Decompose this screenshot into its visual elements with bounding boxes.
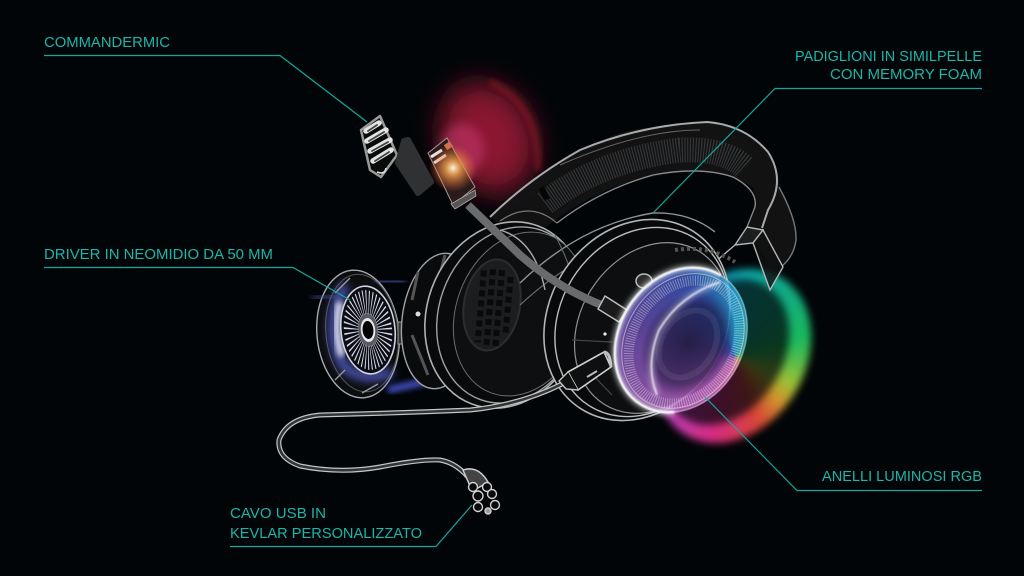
microphone grille	[361, 116, 397, 177]
callout: USB cable: CAVO USB IN	[230, 505, 326, 522]
USB cable multi-core end	[463, 469, 500, 514]
callout: driver	[44, 246, 350, 300]
glowing RGB ring lens	[615, 268, 748, 412]
USB cable	[279, 384, 562, 482]
headband slider	[715, 227, 783, 290]
callout: USB cable: KEVLAR PERSONALIZZATO	[230, 525, 422, 542]
rainbow glow behind ear cup	[658, 263, 818, 449]
microphone foam	[398, 140, 431, 193]
callout: ear pads: PADIGLIONI IN SIMILPELLE	[795, 48, 982, 65]
microphone capsule	[428, 138, 477, 209]
rear housing and ear pad	[394, 199, 611, 431]
red microphone glow	[416, 61, 560, 215]
callout: ear pads: CON MEMORY FOAM	[830, 66, 982, 83]
callout: driver: DRIVER IN NEOMIDIO DA 50 MM	[44, 246, 273, 263]
callout: ear pads	[653, 48, 982, 213]
microphone boom	[468, 205, 627, 322]
callout: USB cable	[230, 505, 472, 546]
callout: RGB rings	[705, 397, 982, 490]
lens rings	[588, 243, 774, 437]
headband	[490, 122, 796, 268]
driver	[311, 266, 428, 402]
callout: CommanderMic	[44, 34, 367, 122]
large ear cup	[500, 184, 767, 456]
callout: CommanderMic: COMMANDERMIC	[44, 34, 170, 51]
USB connector	[559, 352, 611, 390]
callout: RGB rings: ANELLI LUMINOSI RGB	[822, 468, 982, 485]
